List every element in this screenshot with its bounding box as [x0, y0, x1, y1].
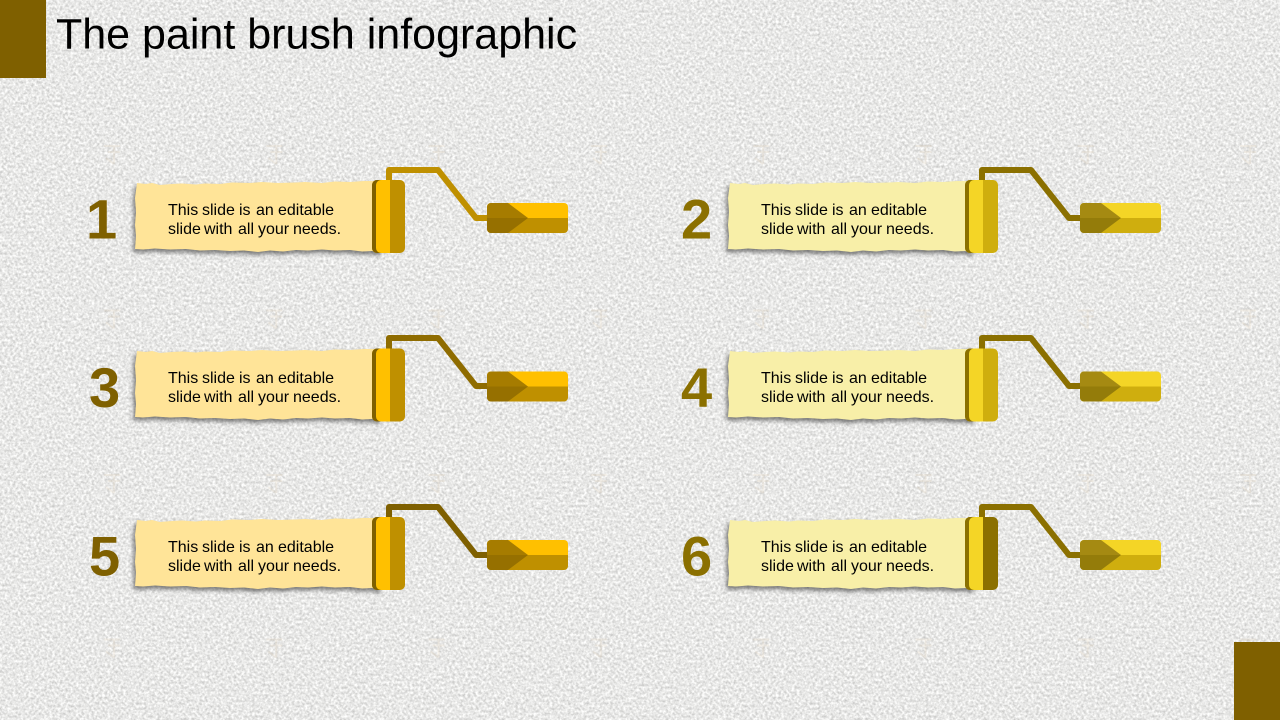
panel text: slide — [202, 539, 239, 556]
corner block: bottom right — [1234, 642, 1280, 720]
panel text: slide — [168, 558, 205, 575]
panel text: your — [851, 389, 887, 406]
panel text: editable — [278, 539, 334, 556]
panel text: your — [851, 221, 887, 238]
panel text: is — [239, 202, 255, 219]
number 6: 6 — [681, 524, 712, 588]
panel text: all — [831, 221, 851, 238]
number 5: 5 — [89, 524, 120, 588]
item 5 — [89, 507, 568, 590]
panel text: an — [849, 539, 871, 556]
roller — [372, 517, 405, 590]
panel text: your — [851, 558, 887, 575]
panel text: needs. — [886, 221, 934, 238]
panel text: an — [256, 370, 278, 387]
number 1: 1 — [86, 188, 117, 250]
torn paper panel — [728, 518, 975, 590]
torn paper panel — [728, 349, 975, 421]
roller — [965, 517, 998, 590]
panel text: slide — [761, 558, 798, 575]
panel text: This — [168, 202, 203, 219]
roller — [372, 348, 405, 422]
handle strap — [982, 338, 1081, 386]
panel text: all — [238, 389, 258, 406]
panel text: This — [761, 202, 796, 219]
panel text: with — [796, 389, 830, 406]
panel text: slide — [168, 221, 205, 238]
panel text: your — [258, 389, 294, 406]
panel text: needs. — [293, 389, 341, 406]
panel text: This — [168, 539, 203, 556]
item 2 — [681, 170, 1161, 253]
panel text: all — [238, 221, 258, 238]
panel text: editable — [278, 202, 334, 219]
panel text: slide — [761, 221, 798, 238]
panel text: all — [831, 558, 851, 575]
panel text: editable — [871, 539, 927, 556]
grip handle — [1080, 372, 1161, 402]
panel text: needs. — [886, 389, 934, 406]
panel text: needs. — [293, 221, 341, 238]
grip handle — [487, 372, 568, 402]
panel text: slide — [761, 389, 798, 406]
grip handle — [487, 203, 568, 233]
panel text: all — [831, 389, 851, 406]
grip handle — [1080, 203, 1161, 233]
handle strap — [982, 170, 1081, 218]
panel text: needs. — [293, 558, 341, 575]
panel text: an — [256, 202, 278, 219]
torn paper panel — [135, 181, 382, 253]
panel text: slide — [202, 370, 239, 387]
panel text: with — [796, 558, 830, 575]
panel text: an — [256, 539, 278, 556]
panel text: is — [239, 370, 255, 387]
panel text: slide — [795, 539, 832, 556]
panel text: slide — [168, 389, 205, 406]
panel text: all — [238, 558, 258, 575]
item 3 — [89, 338, 568, 422]
grip handle — [487, 540, 568, 570]
panel text: with — [203, 221, 237, 238]
panel text: This — [761, 370, 796, 387]
panel text: your — [258, 221, 294, 238]
panel text: editable — [278, 370, 334, 387]
panel text: editable — [871, 370, 927, 387]
panel text: an — [849, 370, 871, 387]
roller — [965, 180, 998, 253]
number 3: 3 — [89, 356, 120, 419]
panel text: needs. — [886, 558, 934, 575]
panel text: an — [849, 202, 871, 219]
panel text: This — [761, 539, 796, 556]
panel text: This — [168, 370, 203, 387]
item 1 — [86, 170, 568, 253]
handle strap — [982, 507, 1081, 555]
panel text: is — [832, 370, 848, 387]
title: The paint brush infographic — [56, 11, 577, 59]
panel text: with — [203, 389, 237, 406]
grip handle — [1080, 540, 1161, 570]
panel text: slide — [795, 202, 832, 219]
panel text: with — [796, 221, 830, 238]
torn paper panel — [728, 181, 975, 253]
item 6 — [681, 507, 1161, 590]
handle strap — [389, 170, 488, 218]
handle strap — [389, 507, 488, 555]
number 4: 4 — [681, 356, 712, 419]
number 2: 2 — [681, 188, 712, 250]
roller — [372, 180, 405, 253]
panel text: is — [832, 539, 848, 556]
panel text: slide — [202, 202, 239, 219]
panel text: with — [203, 558, 237, 575]
torn paper panel — [135, 518, 382, 590]
panel text: slide — [795, 370, 832, 387]
roller — [965, 348, 998, 422]
item 4 — [681, 338, 1161, 422]
panel text: your — [258, 558, 294, 575]
torn paper panel — [135, 349, 382, 421]
corner block: top left — [0, 0, 46, 78]
panel text: is — [832, 202, 848, 219]
panel text: editable — [871, 202, 927, 219]
handle strap — [389, 338, 488, 386]
panel text: is — [239, 539, 255, 556]
